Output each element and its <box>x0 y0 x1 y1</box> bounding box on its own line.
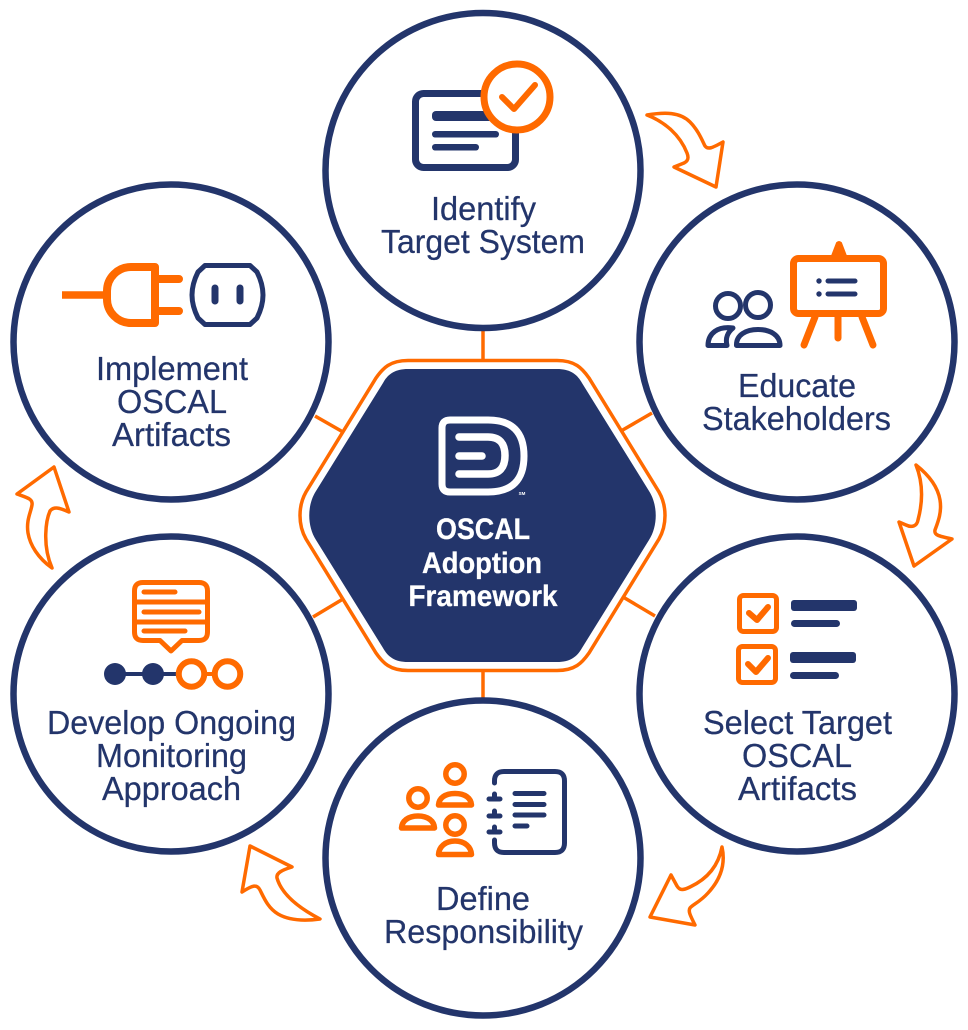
step: Develop Ongoing Monitoring Approach <box>14 536 328 852</box>
step label: Target System <box>381 223 585 260</box>
connectors between hub and steps <box>313 331 655 698</box>
arrow: develop to implement <box>17 467 69 568</box>
icon: people and easel <box>708 242 884 346</box>
step label <box>703 704 892 807</box>
hub title: Adoption <box>422 547 542 580</box>
icon: document with check badge <box>416 64 550 168</box>
step label: OSCAL <box>117 383 227 420</box>
step label: Define <box>436 880 530 917</box>
icon: checklist <box>738 596 857 682</box>
step label: Artifacts <box>738 770 857 807</box>
step label <box>702 367 891 437</box>
icon: plug and outlet <box>62 266 263 324</box>
step circle <box>640 184 954 500</box>
icon: people and notebook <box>402 765 564 854</box>
step label <box>96 350 248 453</box>
hub title: OSCAL <box>436 513 530 546</box>
step label: Monitoring <box>96 737 247 774</box>
arrow: educate to select <box>899 465 952 566</box>
step label: Select Target <box>703 704 892 741</box>
step: Define Responsibility <box>326 700 640 1016</box>
step: Select Target OSCAL Artifacts <box>640 536 954 852</box>
step label: Identify <box>431 190 536 227</box>
step label <box>384 880 583 950</box>
step circle <box>14 184 328 500</box>
step label: Educate <box>738 367 856 404</box>
step: Implement OSCAL Artifacts <box>14 184 328 500</box>
step circle <box>326 13 640 328</box>
step label <box>381 190 585 260</box>
step label: Artifacts <box>112 416 231 453</box>
central hub: OSCAL Adoption Framework <box>300 360 665 670</box>
step circle <box>640 536 954 852</box>
step label: OSCAL <box>742 737 852 774</box>
arrow: select to define <box>650 847 723 925</box>
hub title <box>408 513 558 613</box>
logo mark <box>442 420 524 492</box>
arrow: identify to educate <box>647 113 723 187</box>
step label: Approach <box>102 770 241 807</box>
step label: Implement <box>96 350 248 387</box>
hub title: Framework <box>408 580 558 613</box>
icon: speech bubble and timeline <box>104 582 240 687</box>
step label <box>47 704 296 807</box>
step label: Responsibility <box>384 913 583 950</box>
arrow: define to develop <box>242 846 320 920</box>
hub navy hexagon <box>309 369 656 662</box>
hub orange outline <box>300 360 665 670</box>
step circle <box>326 700 640 1016</box>
step: Educate Stakeholders <box>640 184 954 500</box>
step label: Develop Ongoing <box>47 704 296 741</box>
step label: Stakeholders <box>702 400 891 437</box>
step circle <box>14 536 328 852</box>
logo service mark: SM <box>519 491 526 496</box>
step: Identify Target System <box>326 13 640 328</box>
